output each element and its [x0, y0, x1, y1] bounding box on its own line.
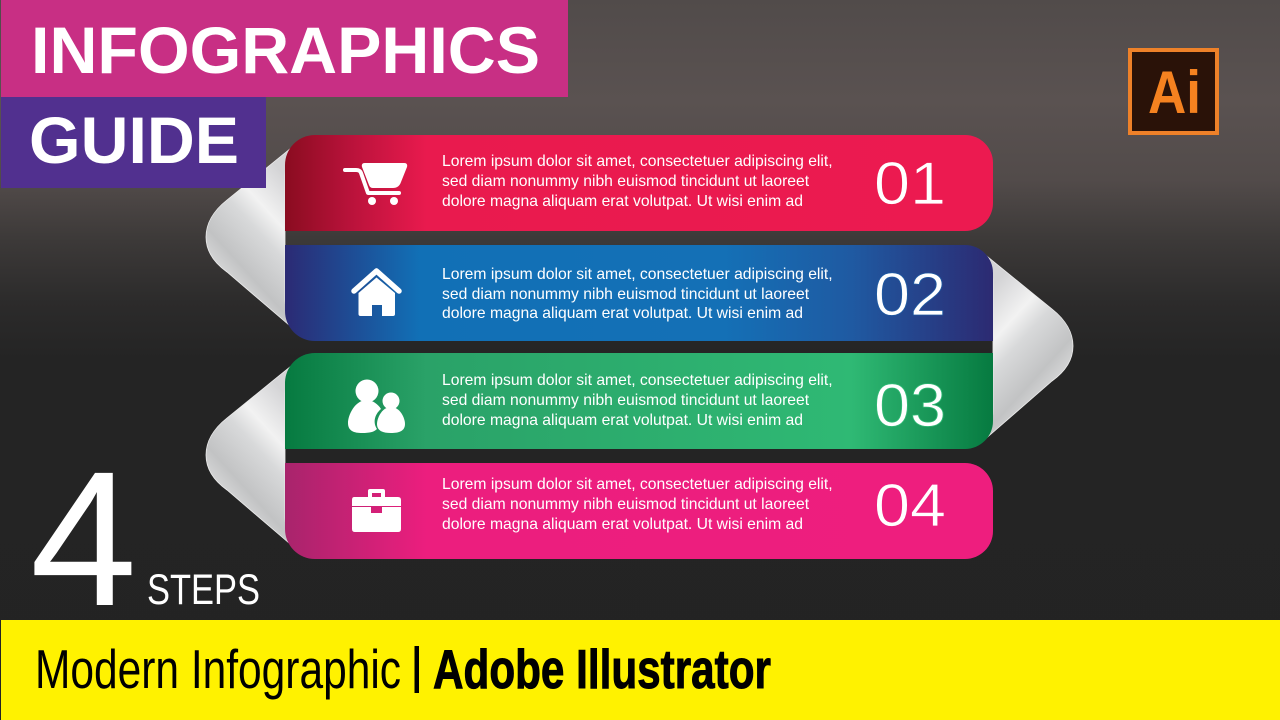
text: step 04 description: Lorem ipsum dolor sit amet, consectetuer adipiscing elit, — [442, 476, 833, 493]
icon: briefcase — [352, 489, 401, 532]
footer banner: Modern Infographic — [35, 638, 401, 700]
text: step 03 description: sed diam nonummy nibh euismod tincidunt ut laoreet — [442, 392, 810, 409]
icon: shopping cart — [345, 163, 407, 205]
number 01: 01 — [874, 150, 946, 217]
fold: step 1 to 2 — [206, 144, 296, 331]
heading: 4 steps: STEPS — [147, 566, 260, 614]
text: step 01 description: Lorem ipsum dolor sit amet, consectetuer adipiscing elit, — [442, 153, 833, 170]
fold: step 3 to 4 — [206, 362, 296, 549]
bar 02 — [285, 245, 993, 341]
text: step 01 description: sed diam nonummy nibh euismod tincidunt ut laoreet — [442, 173, 810, 190]
footer banner — [1, 620, 1280, 720]
bar 01 — [285, 135, 993, 231]
icon: people — [348, 380, 405, 433]
text: step 02 description: dolore magna aliquam erat volutpat. Ut wisi enim ad — [442, 305, 803, 322]
text: step 02 description: Lorem ipsum dolor sit amet, consectetuer adipiscing elit, — [442, 266, 833, 283]
text: step 03 description: dolore magna aliquam erat volutpat. Ut wisi enim ad — [442, 412, 803, 429]
banner: INFOGRAPHICS: INFOGRAPHICS — [31, 13, 540, 87]
text: step 04 description: dolore magna aliquam erat volutpat. Ut wisi enim ad — [442, 516, 803, 533]
number 04: 04 — [874, 472, 946, 539]
number 03: 03 — [874, 372, 946, 439]
icon: house — [354, 271, 399, 316]
banner: INFOGRAPHICS — [1, 0, 568, 97]
footer banner: Adobe Illustrator — [433, 638, 771, 700]
bar 03 — [285, 353, 993, 449]
banner: GUIDE: GUIDE — [29, 103, 239, 177]
banner: GUIDE — [1, 97, 266, 188]
bar 04 — [285, 463, 993, 559]
panel: step 03 — [285, 353, 993, 449]
text: step 02 description: sed diam nonummy nibh euismod tincidunt ut laoreet — [442, 286, 810, 303]
panel: step 02 — [285, 245, 993, 341]
heading: 4 steps: 4 — [30, 431, 137, 646]
icon: Adobe Illustrator logo: Ai — [1148, 59, 1201, 126]
text: step 04 description: sed diam nonummy nibh euismod tincidunt ut laoreet — [442, 496, 810, 513]
fold: step 2 to 3 — [983, 253, 1073, 441]
text: step 03 description: Lorem ipsum dolor sit amet, consectetuer adipiscing elit, — [442, 372, 833, 389]
text: step 01 description: dolore magna aliquam erat volutpat. Ut wisi enim ad — [442, 193, 803, 210]
panel: step 01 — [285, 135, 993, 231]
heading: 4 steps — [30, 431, 260, 646]
panel: step 04 — [285, 463, 993, 559]
number 02: 02 — [874, 261, 946, 328]
icon: Adobe Illustrator logo — [1130, 50, 1217, 133]
